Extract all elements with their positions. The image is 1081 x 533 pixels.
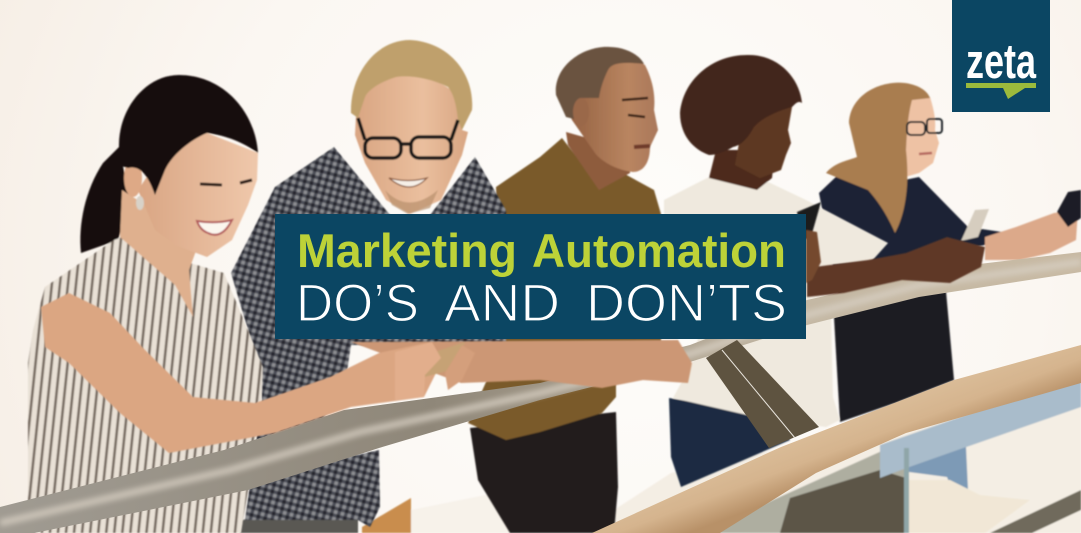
logo: zeta [952,0,1050,112]
heading: DO'S AND DON'TS: DO’S [296,274,419,333]
logo wordmark: zeta [966,35,1037,89]
person: man in olive shirt [468,47,661,533]
curly-haired woman's hand [806,230,821,283]
blue garment reflection [909,447,968,497]
blond hair [351,40,472,130]
phone in right hand [961,209,989,241]
eyes [200,180,252,185]
blue reflection band [880,375,1081,478]
heading: Marketing Automation: Marketing [297,224,517,277]
heading: Marketing Automation: Automation [532,224,786,277]
heading: DO'S AND DON'TS [296,274,787,333]
heading: Marketing Automation [297,224,786,277]
grey trousers at the bottom [240,510,358,533]
mouth [919,153,932,154]
face [138,133,258,257]
ear [573,98,589,126]
head [355,76,468,214]
earring [136,196,144,210]
photo: floor and glass balustrade [362,350,1081,533]
ponytail woman's arm [41,293,441,453]
man's forearm and hand [351,340,692,388]
hair [118,75,258,195]
neck [120,190,200,317]
glass panel, left of post [700,440,909,533]
person: man with glasses [231,40,506,533]
mouth [634,146,650,147]
stubble [385,190,438,214]
short hair [556,47,644,120]
second hand under phone [445,345,475,390]
person: woman with ponytail [28,75,263,533]
neck and face [899,97,939,178]
fingers on phone [395,342,441,400]
white blouse [664,177,888,427]
upper handrail [0,252,1081,533]
curly-haired woman's phone [797,202,821,240]
title box [275,214,806,339]
glasses [907,119,942,135]
smile [197,220,232,235]
heading: DO'S AND DON'TS: DON’TS [586,274,787,333]
logo check underline [966,83,1036,99]
ear [124,159,142,197]
smile [389,178,427,187]
neck [709,150,775,190]
trousers [470,412,618,533]
long dark cardigan [833,280,954,422]
curly-haired woman's arm [807,237,985,297]
glass post [904,448,909,533]
face [735,107,792,178]
strut highlight [722,350,795,438]
orange floor tile [362,498,411,533]
rail support strut [706,340,819,448]
forearms and hands over the rail [41,202,985,453]
phone at far right [1057,190,1081,227]
blouse [28,236,263,533]
head [560,58,658,172]
neck [566,132,630,190]
ponytail woman's phone [413,342,465,380]
arm and hands [985,210,1078,260]
glasses [358,118,458,158]
heading: DO'S AND DON'TS: AND [444,274,560,333]
blond hair [826,83,930,233]
floor band [990,490,1081,533]
dark jacket [819,173,1002,300]
lower wooden handrail [592,345,1081,533]
check shirt [231,147,506,527]
rail highlight [0,262,1081,523]
person: woman with glasses [819,83,1081,422]
afro hair [680,55,802,155]
person: woman with curly hair [664,55,888,487]
olive shirt [468,138,661,440]
eye and brow [622,98,648,117]
ponytail [80,147,130,253]
jeans [669,398,790,487]
